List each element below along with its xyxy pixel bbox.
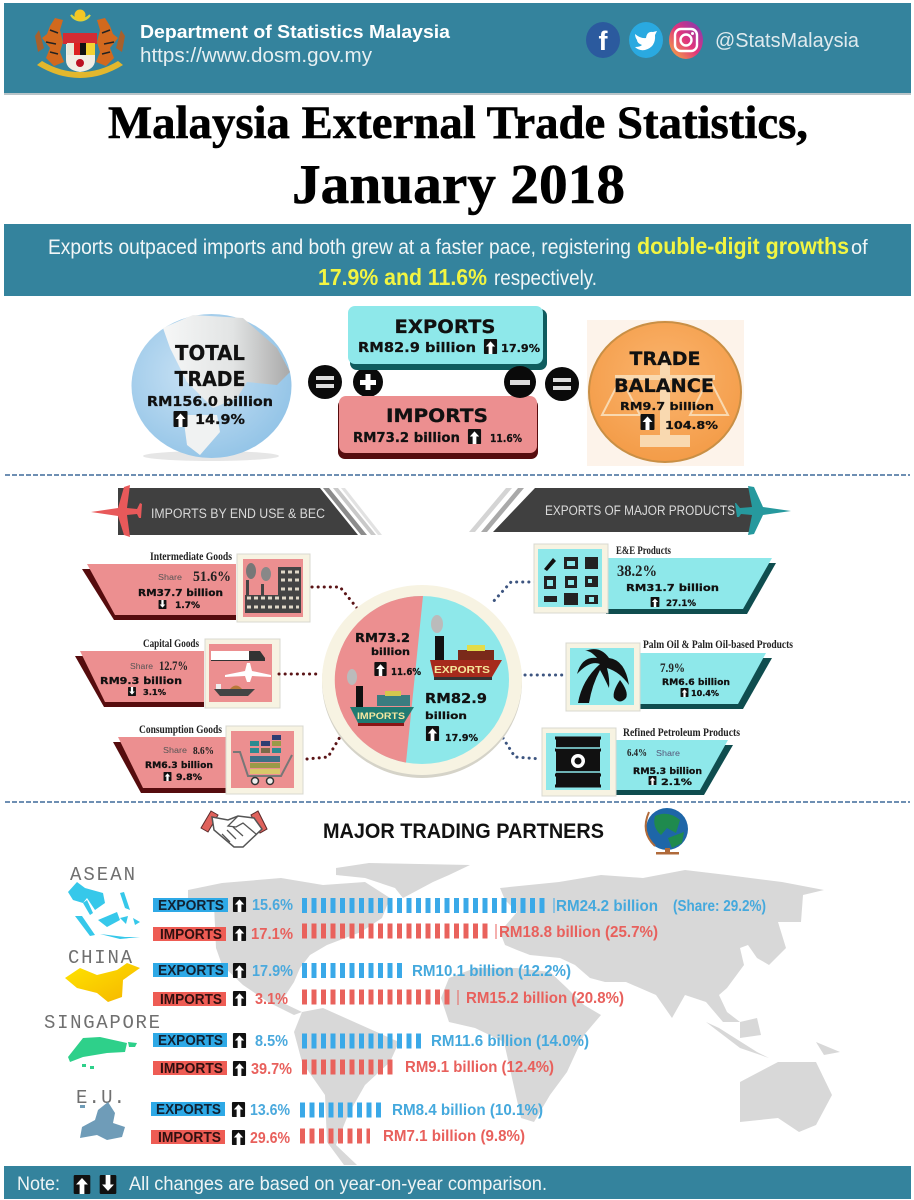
imports slice label: 11.6% bbox=[391, 667, 421, 678]
icon: imports ship: IMPORTS bbox=[357, 711, 405, 722]
summary band: double-digit growths bbox=[637, 233, 849, 259]
panel: consumption goods bbox=[113, 722, 303, 794]
exports box: RM82.9 billion bbox=[358, 341, 476, 356]
panel: palm oil bbox=[566, 637, 793, 711]
exports box: EXPORTS bbox=[394, 316, 496, 338]
panel: refined petroleum bbox=[542, 725, 740, 796]
trade balance circle: 104.8% bbox=[665, 419, 718, 432]
row: China imports: IMPORTS bbox=[160, 992, 222, 1008]
social handle: @StatsMalaysia bbox=[715, 30, 860, 52]
panel: palm oil: Palm Oil & Palm Oil-based Products bbox=[643, 637, 793, 651]
partner: China: CHINA bbox=[68, 947, 133, 969]
panel: intermediate goods: Share bbox=[158, 573, 183, 582]
trade balance circle: RM9.7 billion bbox=[620, 400, 714, 413]
panel: refined petroleum: Share bbox=[656, 749, 681, 758]
row: E.U. imports bbox=[151, 1128, 525, 1147]
icon: shopping cart bbox=[226, 726, 303, 794]
panel: consumption goods: 9.8% bbox=[176, 773, 202, 783]
icon: up and down arrows bbox=[74, 1175, 116, 1194]
panel: refined petroleum: 6.4% bbox=[627, 747, 647, 759]
partner: Singapore: SINGAPORE bbox=[44, 1012, 160, 1034]
exports slice label bbox=[425, 692, 487, 744]
row: China exports bbox=[153, 963, 571, 980]
row: E.U. imports: RM7.1 billion (9.8%) bbox=[383, 1128, 525, 1145]
summary band: Exports outpaced imports and both grew at a faster pace, registering bbox=[48, 236, 631, 259]
icon: palm tree and oil drop bbox=[566, 643, 640, 711]
panel: palm oil: 10.4% bbox=[691, 689, 719, 698]
imports box: RM73.2 billion bbox=[353, 431, 460, 446]
row: E.U. imports: IMPORTS bbox=[158, 1130, 221, 1146]
icon: handshake bbox=[201, 811, 267, 847]
exports heading banner bbox=[469, 486, 791, 535]
equals sign right bbox=[545, 367, 579, 401]
icon: Malaysian coat of arms bbox=[35, 10, 125, 78]
total trade globe: TOTAL bbox=[175, 341, 245, 365]
icon: truck plane ship bbox=[205, 639, 280, 708]
total trade globe: TRADE bbox=[174, 367, 246, 391]
row: E.U. exports: EXPORTS bbox=[156, 1102, 221, 1118]
equals sign left bbox=[308, 365, 342, 399]
icon: ASEAN map bbox=[68, 882, 140, 939]
panel: capital goods: Capital Goods bbox=[143, 636, 199, 650]
connector dots left bbox=[279, 587, 357, 759]
imports box: 11.6% bbox=[490, 432, 522, 445]
icon: oil barrel bbox=[542, 728, 616, 796]
icon: desk globe bbox=[646, 808, 688, 854]
panel: refined petroleum: Refined Petroleum Products bbox=[623, 725, 740, 739]
row: Singapore imports: 39.7% bbox=[251, 1061, 292, 1078]
icon: imports ship bbox=[347, 669, 414, 726]
icon: China map bbox=[65, 963, 140, 1002]
icon: teal plane bbox=[735, 486, 791, 535]
panel: consumption goods: Consumption Goods bbox=[139, 722, 222, 736]
icon: exports ship bbox=[430, 615, 502, 680]
imports slice label bbox=[355, 630, 421, 678]
icon: factory bbox=[237, 554, 310, 622]
icon: twitter bbox=[629, 22, 663, 58]
trade balance circle: BALANCE bbox=[614, 375, 714, 397]
exports slice label: 17.9% bbox=[445, 733, 478, 744]
icon: facebook bbox=[586, 22, 620, 58]
central pie chart bbox=[322, 585, 522, 778]
total trade globe bbox=[132, 314, 292, 461]
row: China imports: 3.1% bbox=[255, 991, 288, 1008]
row: ASEAN imports bbox=[153, 924, 658, 943]
panel: capital goods: 3.1% bbox=[143, 688, 166, 697]
exports box: 17.9% bbox=[501, 342, 540, 355]
row: Singapore exports bbox=[153, 1033, 589, 1050]
row: China imports: RM15.2 billion (20.8%) bbox=[466, 990, 624, 1007]
row: ASEAN exports: EXPORTS bbox=[158, 898, 224, 914]
row: ASEAN imports: IMPORTS bbox=[160, 927, 222, 943]
panel: E&E products: 38.2% bbox=[617, 563, 657, 580]
icon: facebook: f bbox=[598, 26, 608, 56]
icon: instagram bbox=[669, 21, 703, 59]
icon: Singapore map bbox=[68, 1037, 137, 1069]
row: ASEAN exports: 15.6% bbox=[252, 897, 293, 914]
row: E.U. exports: RM8.4 billion (10.1%) bbox=[392, 1102, 543, 1119]
partner: E.U.: E.U. bbox=[76, 1087, 125, 1109]
connector dots right bbox=[492, 582, 565, 759]
row: ASEAN exports bbox=[153, 897, 766, 915]
summary band: 17.9% and 11.6% bbox=[318, 264, 487, 290]
panel: intermediate goods: 1.7% bbox=[175, 601, 200, 611]
panel: E&E products: RM31.7 billion bbox=[626, 583, 719, 594]
row: Singapore exports: RM11.6 billion (14.0%) bbox=[431, 1033, 589, 1050]
exports heading banner: EXPORTS OF MAJOR PRODUCTS bbox=[545, 503, 735, 518]
panel: E&E products bbox=[534, 543, 776, 614]
imports slice label: RM73.2 bbox=[355, 630, 410, 645]
department name: Department of Statistics Malaysia bbox=[140, 22, 451, 42]
title: Malaysia External Trade Statistics, bbox=[108, 97, 808, 149]
panel: capital goods: RM9.3 billion bbox=[100, 676, 182, 687]
panel: palm oil: 7.9% bbox=[660, 660, 685, 675]
footer note: All changes are based on year-on-year comparison. bbox=[129, 1174, 547, 1195]
footer note: Note: bbox=[17, 1174, 60, 1195]
panel: consumption goods: Share bbox=[163, 746, 188, 755]
trade balance circle bbox=[587, 320, 744, 466]
partners heading: MAJOR TRADING PARTNERS bbox=[323, 820, 604, 843]
panel: capital goods bbox=[75, 636, 280, 708]
panel: capital goods: 12.7% bbox=[159, 658, 188, 673]
world map silhouette bbox=[188, 863, 840, 1165]
panel: intermediate goods bbox=[82, 549, 310, 622]
row: ASEAN exports: RM24.2 billion bbox=[556, 898, 658, 915]
footer note bbox=[4, 1166, 911, 1199]
panel: capital goods: Share bbox=[130, 662, 154, 671]
total trade globe: RM156.0 billion bbox=[147, 395, 273, 410]
panel: consumption goods: RM6.3 billion bbox=[145, 761, 213, 771]
exports slice label: RM82.9 bbox=[425, 692, 487, 707]
panel: E&E products: E&E Products bbox=[616, 543, 671, 557]
row: E.U. exports: 13.6% bbox=[250, 1102, 290, 1119]
partner: E.U. bbox=[76, 1087, 543, 1147]
panel: refined petroleum: RM5.3 billion bbox=[633, 767, 702, 777]
panel: palm oil: RM6.6 billion bbox=[662, 678, 730, 688]
summary band: of bbox=[851, 237, 868, 259]
panel: intermediate goods: Intermediate Goods bbox=[150, 549, 232, 563]
header banner bbox=[4, 3, 911, 95]
icon: red plane bbox=[91, 485, 142, 537]
imports heading banner: IMPORTS BY END USE & BEC bbox=[151, 506, 325, 521]
row: Singapore imports: RM9.1 billion (12.4%) bbox=[405, 1059, 554, 1076]
row: China exports: 17.9% bbox=[252, 963, 293, 980]
exports box bbox=[348, 306, 547, 370]
row: China imports bbox=[153, 990, 624, 1008]
partner: ASEAN: ASEAN bbox=[70, 864, 135, 886]
icon: electronics grid bbox=[534, 544, 608, 613]
panel: intermediate goods: RM37.7 billion bbox=[138, 588, 223, 599]
panel: E&E products: 27.1% bbox=[666, 599, 696, 609]
row: ASEAN imports: RM18.8 billion (25.7%) bbox=[499, 924, 658, 941]
row: ASEAN imports: 17.1% bbox=[251, 926, 293, 943]
icon: exports ship: EXPORTS bbox=[434, 665, 490, 676]
row: ASEAN exports: (Share: 29.2%) bbox=[673, 898, 766, 915]
row: Singapore exports: 8.5% bbox=[255, 1033, 288, 1050]
partner: China bbox=[65, 947, 624, 1008]
row: E.U. imports: 29.6% bbox=[250, 1130, 290, 1147]
icon: Europe map bbox=[80, 1102, 125, 1140]
row: Singapore imports: IMPORTS bbox=[160, 1061, 223, 1077]
title bbox=[108, 97, 808, 216]
summary band: respectively. bbox=[494, 267, 597, 290]
summary band bbox=[4, 224, 911, 296]
title: January 2018 bbox=[292, 154, 625, 216]
row: E.U. exports bbox=[151, 1102, 543, 1119]
imports box: IMPORTS bbox=[386, 405, 488, 427]
partner: Singapore bbox=[44, 1012, 589, 1078]
imports heading banner bbox=[91, 485, 382, 537]
exports slice label: billion bbox=[425, 711, 467, 722]
imports slice label: billion bbox=[371, 647, 410, 658]
row: China exports: EXPORTS bbox=[158, 963, 224, 979]
row: Singapore exports: EXPORTS bbox=[158, 1033, 223, 1049]
imports box bbox=[338, 396, 538, 459]
row: Singapore imports bbox=[153, 1059, 554, 1078]
total trade globe: 14.9% bbox=[195, 413, 245, 428]
website url: https://www.dosm.gov.my bbox=[140, 45, 372, 67]
panel: consumption goods: 8.6% bbox=[193, 745, 214, 757]
panel: refined petroleum: 2.1% bbox=[661, 778, 693, 788]
minus sign bbox=[504, 366, 536, 398]
row: China exports: RM10.1 billion (12.2%) bbox=[412, 963, 571, 980]
panel: intermediate goods: 51.6% bbox=[193, 569, 231, 585]
plus sign bbox=[353, 367, 383, 397]
partner: ASEAN bbox=[68, 864, 766, 943]
trade balance circle: TRADE bbox=[630, 348, 700, 370]
